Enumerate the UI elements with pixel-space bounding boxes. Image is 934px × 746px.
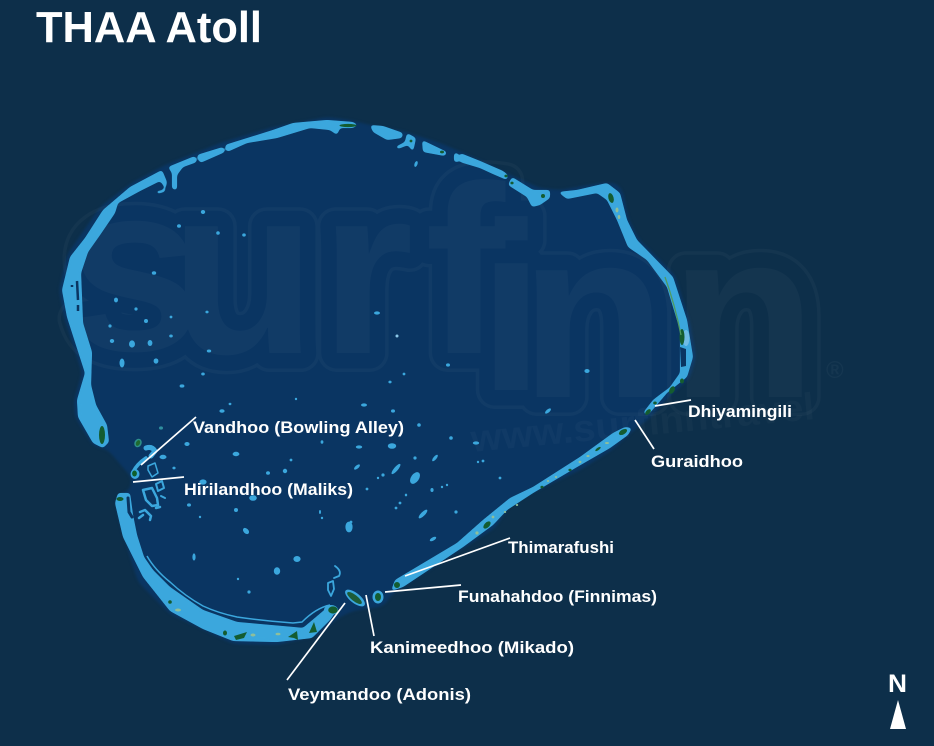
label: Thimarafushi [405, 538, 614, 576]
small coral cays [108, 161, 590, 594]
reef: northern rim [168, 120, 358, 190]
label: Kanimeedhoo (Mikado) [366, 595, 574, 657]
watermark: surfinn logo: www.surfinntravel [468, 386, 816, 461]
label: Guraidhoo: Guraidhoo [651, 452, 743, 471]
reef: south-east strip [391, 427, 632, 591]
label: Veymandoo (Adonis): Veymandoo (Adonis) [288, 685, 471, 704]
label: Veymandoo (Adonis) [287, 603, 471, 704]
islands with vegetation [99, 124, 684, 640]
label: Dhiyamingili: Dhiyamingili [688, 402, 792, 421]
label: Funahahdoo (Finnimas): Funahahdoo (Finnimas) [458, 587, 657, 606]
label: Guraidhoo [635, 420, 743, 471]
reef: western rim [62, 170, 167, 448]
reef: eastern rim [558, 183, 693, 415]
label: Funahahdoo (Finnimas) [385, 585, 657, 606]
label: Thimarafushi: Thimarafushi [508, 538, 614, 557]
label: Dhiyamingili [655, 400, 792, 421]
label: Hirilandhoo (Maliks): Hirilandhoo (Maliks) [184, 480, 353, 499]
atoll reef [62, 120, 693, 642]
label: Vandhoo (Bowling Alley): Vandhoo (Bowling Alley) [193, 418, 404, 437]
lagoon [59, 117, 696, 645]
reef: north-east fragments [370, 125, 550, 207]
reef rings near Maliks and Mikado [133, 447, 340, 596]
label: Hirilandhoo (Maliks) [133, 477, 353, 499]
title: THAA Atoll [36, 3, 262, 52]
reef: south-west rim [115, 493, 338, 642]
watermark: surfinn logo: ® [826, 357, 844, 384]
label: Vandhoo (Bowling Alley) [141, 417, 404, 465]
label: Kanimeedhoo (Mikado): Kanimeedhoo (Mikado) [370, 638, 574, 657]
reef details [72, 281, 690, 623]
watermark: surfinn logo [638, 406, 812, 416]
north arrow: N [888, 670, 907, 698]
north arrow [888, 670, 907, 729]
